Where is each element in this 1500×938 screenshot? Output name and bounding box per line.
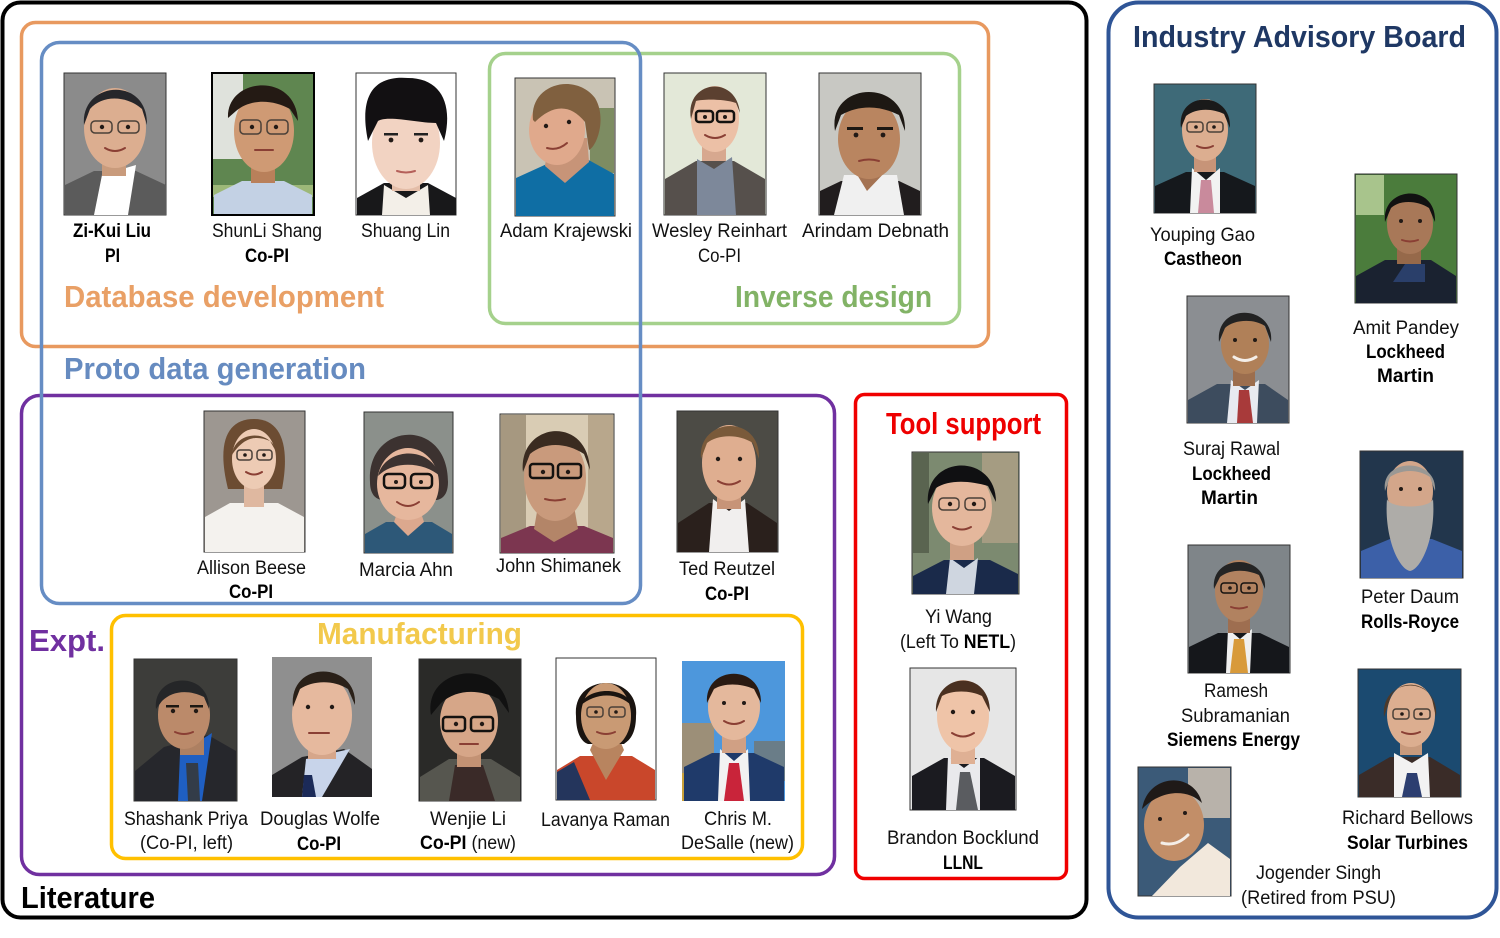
person: Wesley Reinhart: Wesley Reinhart [652, 221, 788, 242]
person: Zi-Kui Liu: Zi-Kui Liu [73, 221, 151, 242]
person: Adam Krajewski: Adam Krajewski [500, 221, 632, 242]
panel: inverse design frame [490, 54, 960, 324]
person: Peter Daum [1360, 451, 1463, 633]
photo: Arindam Debnath [819, 73, 921, 215]
person: Jogender Singh: (Retired from PSU) [1241, 888, 1396, 909]
person: Youping Gao [1150, 84, 1256, 270]
person: Brandon Bocklund: LLNL [943, 853, 983, 874]
panel: experiment frame [22, 396, 834, 874]
heading: manufacturing: Manufacturing [317, 616, 522, 651]
person: Arindam Debnath [802, 73, 949, 242]
person: Allison Beese [197, 411, 306, 603]
photo: Shuang Lin [356, 73, 456, 215]
person: Ramesh Subramanian [1167, 545, 1300, 751]
person: John Shimanek: John Shimanek [496, 556, 621, 577]
person: Chris M. DeSalle [681, 661, 794, 854]
heading: literature: Literature [21, 880, 155, 915]
person: Shashank Priya: Shashank Priya [124, 809, 248, 830]
photo: Wesley Reinhart [664, 73, 766, 215]
photo: Shashank Priya [134, 659, 237, 801]
person: Ramesh Subramanian: Ramesh [1204, 681, 1268, 702]
person: Suraj Rawal: Suraj Rawal [1183, 439, 1280, 460]
person: Wesley Reinhart [652, 73, 788, 267]
photo: Allison Beese [204, 411, 305, 552]
person: ShunLi Shang: ShunLi Shang [212, 221, 322, 242]
person: Marcia Ahn [359, 412, 453, 581]
person: Shuang Lin: Shuang Lin [361, 221, 450, 242]
person: Shuang Lin [356, 73, 456, 242]
person: Peter Daum: Rolls-Royce [1361, 612, 1459, 633]
panel: industry advisory board frame [1108, 2, 1496, 918]
photo: Lavanya Raman [556, 658, 656, 800]
person: Amit Pandey [1353, 174, 1459, 387]
photo: John Shimanek [500, 414, 614, 553]
person: Chris M. DeSalle: DeSalle (new) [681, 833, 794, 854]
photo: Marcia Ahn [364, 412, 453, 553]
heading: industry advisory board: Industry Advisory Board [1133, 19, 1466, 54]
person: Wenjie Li: Co-PI (new) [420, 833, 516, 854]
photo: Yi Wang [912, 452, 1019, 594]
person: Douglas Wolfe: Douglas Wolfe [260, 809, 380, 830]
panel: database development frame [22, 22, 988, 346]
person: Zi-Kui Liu [64, 73, 166, 267]
person: Wesley Reinhart: Co-PI [698, 246, 741, 267]
person: Yi Wang: Yi Wang [925, 607, 992, 628]
photo: Brandon Bocklund [910, 668, 1016, 810]
panel: manufacturing frame [112, 616, 802, 858]
person: Yi Wang: (Left To NETL) [900, 632, 1016, 653]
person: Zi-Kui Liu: PI [105, 246, 120, 267]
person: Amit Pandey: Amit Pandey [1353, 318, 1459, 339]
person: Marcia Ahn: Marcia Ahn [359, 560, 453, 581]
person: Shashank Priya: (Co-PI, left) [140, 833, 233, 854]
person: Lavanya Raman [541, 658, 670, 831]
person: Douglas Wolfe [260, 657, 380, 855]
person: Ted Reutzel [677, 411, 778, 605]
heading: expt: Expt. [29, 623, 105, 658]
photo: Amit Pandey [1355, 174, 1457, 303]
photo: Adam Krajewski [515, 78, 615, 216]
person: Jogender Singh [1138, 767, 1396, 909]
panel: tool support frame [856, 394, 1066, 878]
person: Richard Bellows [1342, 669, 1473, 854]
photo: Peter Daum [1360, 451, 1463, 578]
heading: tool support: Tool support [886, 406, 1041, 441]
person: John Shimanek [496, 414, 621, 577]
person: Allison Beese: Co-PI [229, 582, 273, 603]
person: ShunLi Shang: Co-PI [245, 246, 289, 267]
person: Adam Krajewski [500, 78, 632, 242]
photo: Wenjie Li [419, 659, 521, 801]
photo: Youping Gao [1154, 84, 1256, 213]
person: Suraj Rawal [1183, 296, 1289, 509]
person: Amit Pandey: Martin [1377, 366, 1434, 387]
person: Brandon Bocklund [887, 668, 1039, 874]
person: Shashank Priya [124, 659, 248, 854]
person: Ted Reutzel: Ted Reutzel [679, 559, 775, 580]
person: ShunLi Shang [212, 73, 322, 267]
person: Douglas Wolfe: Co-PI [297, 834, 341, 855]
photo: Ramesh Subramanian [1188, 545, 1290, 673]
person: Suraj Rawal: Martin [1201, 488, 1258, 509]
person: Arindam Debnath: Arindam Debnath [802, 221, 949, 242]
heading: inverse design: Inverse design [735, 279, 932, 314]
photo: Suraj Rawal [1187, 296, 1289, 423]
person: Youping Gao: Castheon [1164, 249, 1242, 270]
person: Ramesh Subramanian: Subramanian [1181, 706, 1290, 727]
person: Chris M. DeSalle: Chris M. [704, 809, 772, 830]
person: Brandon Bocklund: Brandon Bocklund [887, 828, 1039, 849]
person: Lavanya Raman: Lavanya Raman [541, 810, 670, 831]
photo: Richard Bellows [1358, 669, 1461, 797]
person: Jogender Singh: Jogender Singh [1256, 863, 1381, 884]
person: Yi Wang [900, 452, 1019, 653]
heading: proto data generation: Proto data generation [64, 351, 366, 386]
person: Wenjie Li [419, 659, 521, 854]
photo: Zi-Kui Liu [64, 73, 166, 215]
person: Ted Reutzel: Co-PI [705, 584, 749, 605]
photo: ShunLi Shang [212, 73, 314, 215]
person: Amit Pandey: Lockheed [1366, 342, 1445, 363]
person: Peter Daum: Peter Daum [1361, 587, 1459, 608]
person: Suraj Rawal: Lockheed [1192, 464, 1271, 485]
person: Allison Beese: Allison Beese [197, 558, 306, 579]
panel: proto data generation frame [42, 42, 640, 604]
person: Ramesh Subramanian: Siemens Energy [1167, 730, 1300, 751]
heading: database development: Database development [64, 279, 384, 314]
photo: Ted Reutzel [677, 411, 778, 552]
photo: Jogender Singh [1138, 767, 1231, 896]
photo: Chris M. DeSalle [682, 661, 785, 801]
photo: Douglas Wolfe [272, 657, 372, 797]
panel: literature outer frame [2, 2, 1086, 918]
person: Richard Bellows: Richard Bellows [1342, 808, 1473, 829]
person: Wenjie Li: Wenjie Li [430, 809, 506, 830]
person: Youping Gao: Youping Gao [1150, 225, 1255, 246]
person: Richard Bellows: Solar Turbines [1347, 833, 1468, 854]
